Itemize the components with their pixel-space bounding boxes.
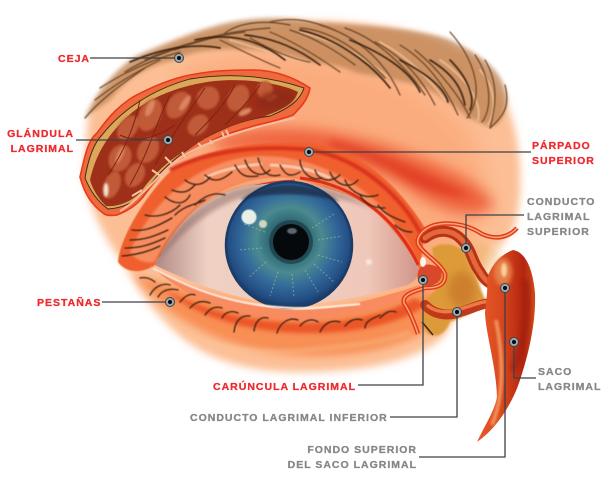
marker: ceja: [174, 54, 184, 62]
marker: glandula: [164, 136, 172, 144]
marker: conducto inferior: [452, 308, 462, 316]
lacrimal apparatus: [404, 223, 535, 442]
leader: fondo: [419, 288, 505, 457]
highlights: [242, 210, 256, 224]
skin: [84, 21, 520, 372]
marker: parpado: [304, 148, 314, 156]
label: parpado superior: PÁRPADO: [532, 140, 591, 152]
iris fibers: [238, 214, 342, 298]
pupil: [269, 220, 313, 264]
label: parpado superior: SUPERIOR: [532, 155, 595, 167]
eyelashes: upper: [122, 158, 412, 256]
shading: red fold above the eyelid: [215, 128, 495, 214]
label: caruncula lagrimal: CARÚNCULA LAGRIMAL: [213, 380, 356, 393]
label: conducto lagrimal superior: SUPERIOR: [527, 226, 590, 238]
lacrimal gland: [80, 70, 310, 215]
label: conducto lagrimal superior: LAGRIMAL: [527, 211, 590, 223]
leader: conducto inferior: [390, 312, 457, 417]
label: saco lagrimal: SACO: [538, 366, 572, 378]
leader: conducto superior: [466, 215, 524, 248]
leader: pestanas: [102, 301, 170, 303]
label: fondo superior del saco lagrimal: FONDO SUPERIOR: [307, 444, 417, 456]
label: fondo superior del saco lagrimal: DEL SACO LAGRIMAL: [288, 459, 417, 471]
caruncle: [417, 265, 442, 286]
leader: ceja: [90, 57, 179, 59]
leader lines and markers: [76, 54, 536, 457]
ducts: [132, 130, 229, 196]
marker: saco: [510, 338, 518, 346]
marker: pestanas: [166, 298, 174, 306]
label: glandula lagrimal: GLÁNDULA: [7, 128, 74, 140]
leader: caruncula: [358, 280, 423, 385]
lower eyelid and lashes: [140, 265, 425, 352]
marker: fondo: [500, 284, 510, 292]
gland tissue: [90, 80, 298, 206]
fatty tissue: [422, 244, 486, 336]
leader: glandula: [76, 139, 168, 141]
marker: caruncula: [418, 276, 428, 284]
eyeball: [155, 182, 420, 308]
canaliculi: [425, 231, 500, 288]
lacrimal sac: [477, 250, 535, 442]
label: ceja: CEJA: [58, 53, 90, 65]
marker: conducto superior: [462, 244, 470, 252]
label: pestanas: PESTAÑAS: [37, 296, 101, 309]
leader: saco: [514, 342, 536, 378]
leader: parpado: [309, 151, 531, 153]
label: conducto lagrimal superior: CONDUCTO: [527, 196, 595, 208]
upper canal line: [404, 223, 517, 334]
iris: [226, 182, 352, 308]
white lid highlights: [205, 164, 330, 178]
label: conducto lagrimal inferior: CONDUCTO LAGRIMAL INFERIOR: [190, 412, 388, 424]
eyebrow: [85, 18, 507, 128]
eye illustration: [80, 18, 535, 442]
upper eyelid: [118, 142, 425, 271]
label: saco lagrimal: LAGRIMAL: [538, 381, 601, 393]
label: glandula lagrimal: LAGRIMAL: [11, 143, 74, 155]
